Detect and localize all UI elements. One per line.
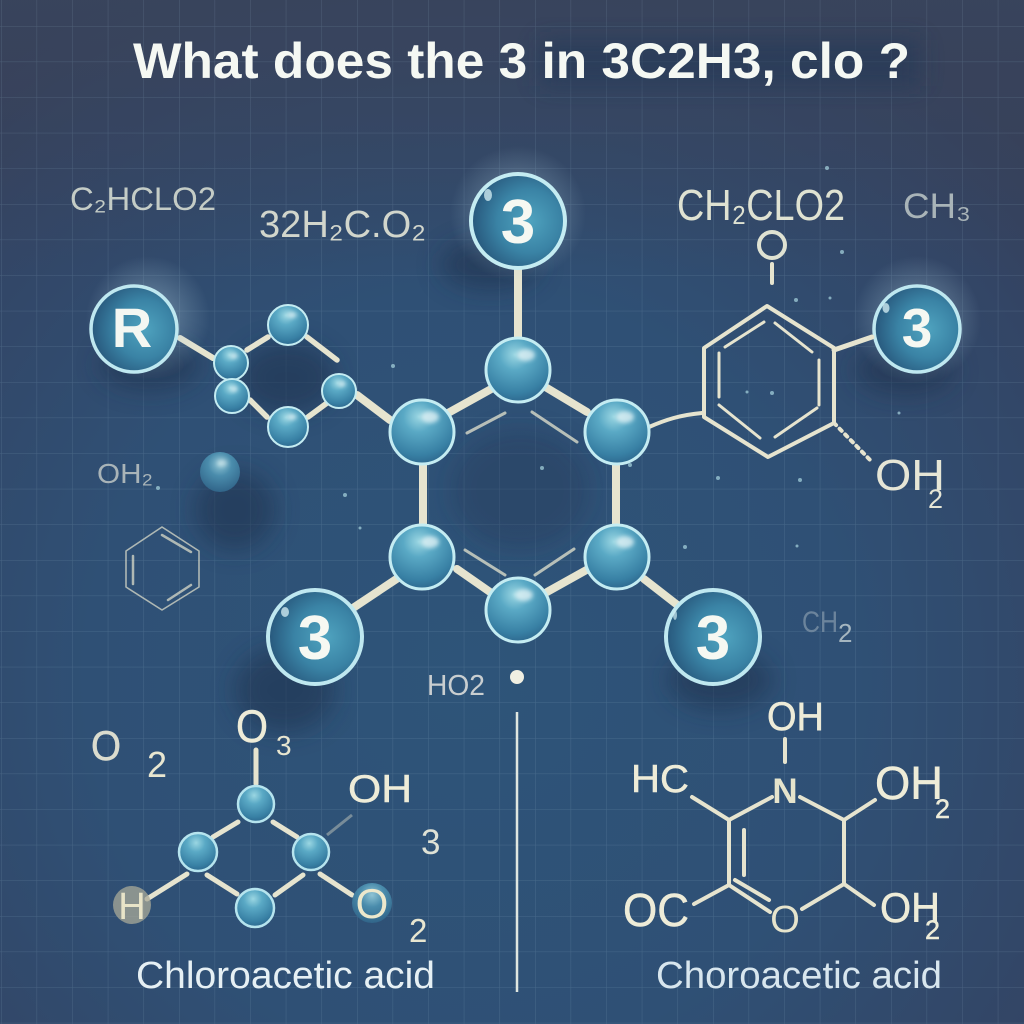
atom: lower right 3 sphere: 3 xyxy=(696,604,730,673)
formula: O3 top: O xyxy=(236,701,268,752)
formula: faint CH2 lower right: CH xyxy=(802,606,838,639)
formula: O2 subscript: 2 xyxy=(409,912,427,949)
label HC: HC xyxy=(631,758,689,801)
formula: OH2 right: 2 xyxy=(928,484,943,514)
label OH2 upper: OH xyxy=(875,757,943,809)
lower left bonds xyxy=(147,750,352,899)
formula: O2 far left: 2 xyxy=(147,744,167,785)
lower left atoms xyxy=(179,786,329,927)
formula: 32H2CO2: 32H₂C.O₂ xyxy=(259,204,426,246)
formula: O2 far left: O xyxy=(91,722,121,769)
label OH2 lower: 2 xyxy=(925,915,940,945)
soft dark shadows behind atoms xyxy=(100,240,955,732)
formula: OH2 right: OH xyxy=(875,451,945,500)
atom: right 3 sphere xyxy=(853,256,981,384)
label OH2 lower: OH xyxy=(880,884,940,931)
formula: O2 far left xyxy=(91,722,167,785)
formula: faint CH2 lower right xyxy=(802,606,852,648)
atom: right 3 sphere: 3 xyxy=(902,297,932,359)
formula: OH3: 3 xyxy=(421,823,440,862)
lower left molecule xyxy=(113,750,392,928)
small ring bonds xyxy=(247,337,337,417)
formula: HO2 centre: HO2 xyxy=(427,670,485,702)
atom: large R sphere: R xyxy=(112,296,152,359)
bond: benzene to OH2 xyxy=(834,423,873,463)
formula: OH2 left: OH₂ xyxy=(97,458,153,489)
formula: CH3: CH₃ xyxy=(903,187,971,226)
atom: top 3 sphere xyxy=(450,146,586,282)
title: What does the 3 in 3C2H3, clo ? xyxy=(133,33,910,89)
formula: O3 top xyxy=(236,701,292,761)
atom: top 3 sphere: 3 xyxy=(501,188,535,257)
lower right molecule xyxy=(623,695,950,945)
atom: lower left 3 sphere: 3 xyxy=(298,604,332,673)
formula: CH2CLO2: CH₂CLO2 xyxy=(677,181,845,230)
lower right bonds xyxy=(692,739,875,912)
ring label N: N xyxy=(772,772,798,811)
formula: O3 top: 3 xyxy=(276,730,292,761)
label OH2 upper: 2 xyxy=(935,794,950,824)
divider with dot xyxy=(510,670,524,992)
inner double bond marks xyxy=(465,412,577,575)
loose dull atom xyxy=(200,452,240,492)
atom: lower right 3 sphere xyxy=(666,590,760,684)
label OH top: OH xyxy=(767,695,824,739)
small ring atoms xyxy=(214,305,356,447)
atom: lower left 3 sphere xyxy=(268,590,362,684)
formula: OH3 xyxy=(327,768,440,862)
title backing shadow xyxy=(540,40,920,86)
faint benzene ring left xyxy=(126,527,199,610)
formula: C2HCLO2: C₂HCLO2 xyxy=(70,181,216,217)
label OC: OC xyxy=(623,884,689,936)
formula: OH3: OH xyxy=(348,768,412,811)
main molecule bonds xyxy=(180,265,702,608)
ring label O: O xyxy=(770,899,800,941)
central ring atoms xyxy=(390,338,649,642)
caption: right: Choroacetic acid xyxy=(656,955,942,997)
oxygen top of benzene xyxy=(759,232,785,283)
formula: faint CH2 lower right: 2 xyxy=(838,618,852,648)
atom: large R sphere xyxy=(86,256,210,380)
right atom O: O xyxy=(356,880,388,927)
left pale atom H: H xyxy=(118,886,146,928)
bond: benzene to right sphere xyxy=(834,337,872,350)
stray sparkle specks xyxy=(156,166,900,549)
caption: left: Chloroacetic acid xyxy=(136,955,435,997)
benzene ring right xyxy=(704,306,834,457)
